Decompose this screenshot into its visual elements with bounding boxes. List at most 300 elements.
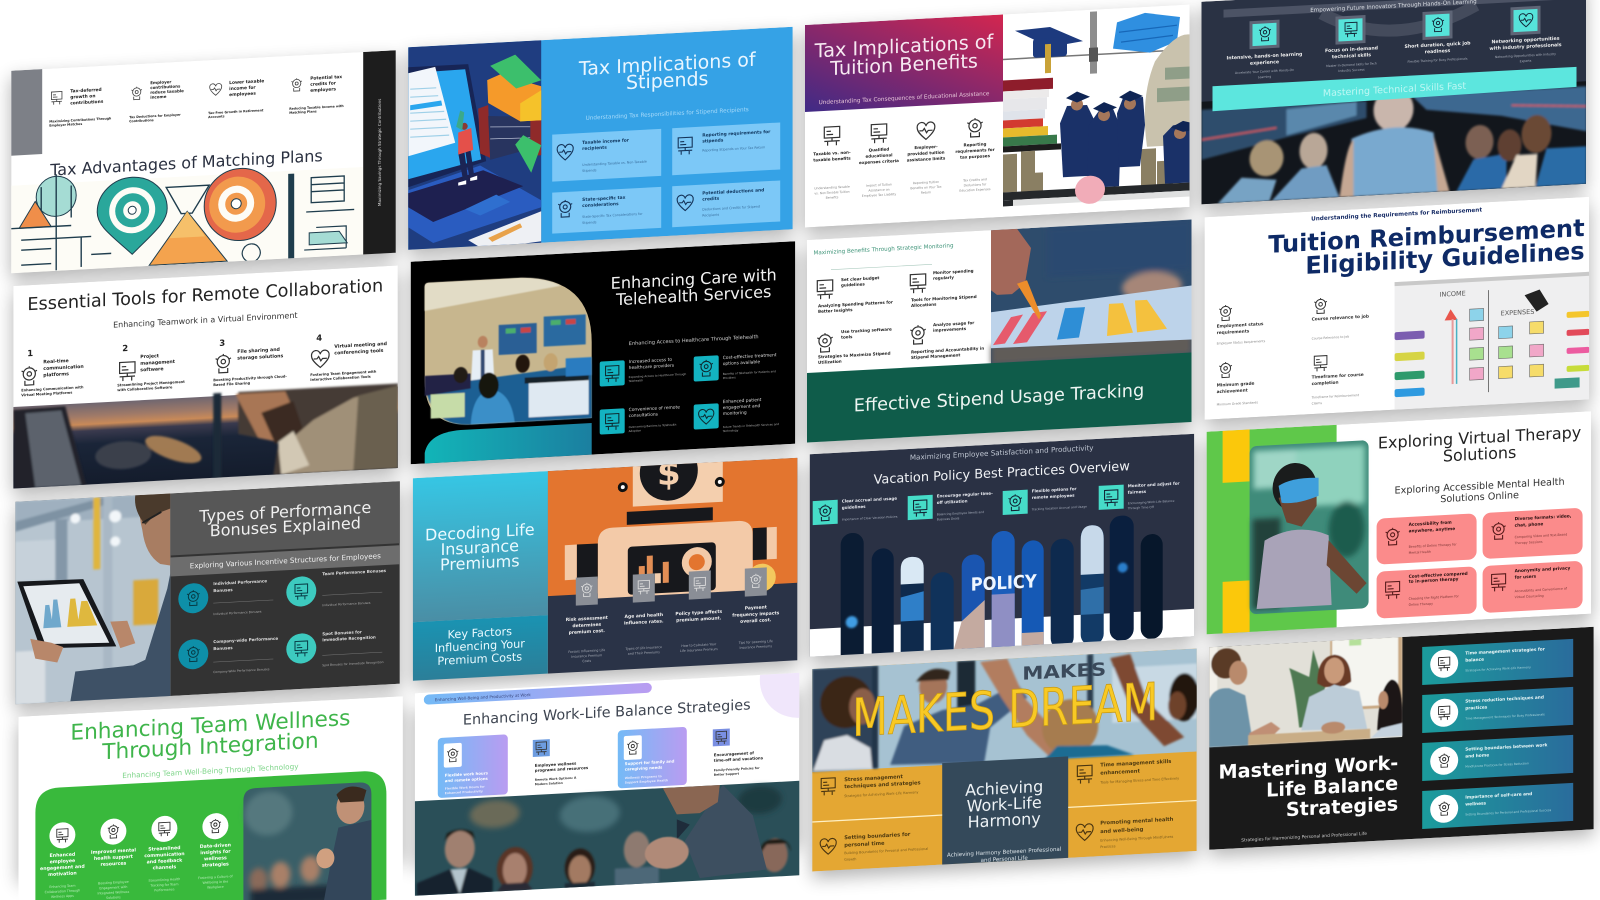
four numbered tools: conferencing tools	[334, 348, 384, 356]
strategy cards: and remote options	[445, 776, 489, 783]
pink cards	[1377, 508, 1583, 619]
subtitle: Enhancing Teamwork in a Virtual Environment	[113, 311, 298, 330]
slide: Enhancing Work-Life Balance Strategies	[414, 673, 800, 896]
item row: tax benefits: credits for	[310, 80, 337, 88]
eligibility items: Course Relevance to Job	[1312, 335, 1349, 341]
slide: Mastering Technical Skills Fast	[1202, 0, 1586, 205]
eligibility items: Minimum grade	[1217, 382, 1254, 389]
premium factors: Age and health	[625, 613, 663, 620]
four benefits	[813, 117, 995, 201]
four numbered tools: Based File Sharing	[213, 381, 251, 387]
photo: pen over chart	[991, 219, 1192, 365]
eligibility items: Claims	[1312, 401, 1322, 406]
amber items: Setting boundaries for	[844, 832, 910, 841]
photo: woman with VR headset	[1250, 440, 1369, 614]
cards grid: Stipends	[582, 220, 597, 225]
amber items: personal time	[844, 841, 885, 849]
title: Life Balance	[1266, 772, 1398, 802]
premium factors: Costs	[582, 659, 592, 663]
title: Tuition Reimbursement	[1268, 214, 1585, 259]
subtitle: Maximizing Benefits Through Strategic Monitoring	[813, 243, 954, 257]
monitoring items: Analyze usage for	[933, 320, 974, 327]
slide: Types of Performance Bonuses Explained	[15, 481, 400, 705]
title: Mastering Work-	[1219, 751, 1398, 784]
slide: Tax Implications of Stipends	[408, 27, 793, 253]
title: Enhancing Care with	[611, 265, 777, 293]
cards grid: Deductions and Credits for Stipend	[702, 205, 760, 212]
strategy cards: Time management strategies for	[1465, 647, 1545, 657]
icon grid: engagement and	[723, 403, 760, 411]
bonus type grid: Individual Performance	[213, 578, 267, 586]
skill columns: with industry professionals	[1489, 42, 1562, 52]
monitoring items: regularly	[933, 275, 954, 281]
header panel	[170, 481, 400, 555]
photo strips: POLICY	[841, 513, 1163, 678]
monitoring items: guidelines	[841, 281, 865, 288]
illustration: scale with graduates and books	[1003, 6, 1190, 208]
four benefits: expenses criteria	[859, 158, 899, 165]
four numbered tools: Project	[140, 354, 159, 360]
skill columns: experience	[1250, 59, 1279, 67]
photo: team high five with sign	[812, 648, 1199, 772]
strategy cards: Modern Solution	[535, 781, 563, 786]
item row: tax benefits: income	[150, 94, 167, 100]
icon grid: Adoption	[629, 428, 641, 433]
four numbered tools: File sharing and	[237, 348, 280, 355]
premium factors: Tips for Lowering Life	[739, 639, 773, 645]
strategy cards: Setting Boundaries for Personal and Professional Success	[1465, 808, 1552, 817]
slide: Tuition Reimbursement Eligibility Guidelines	[1205, 197, 1590, 420]
four numbered tools: Virtual Meeting Platforms	[21, 391, 72, 397]
icon grid: monitoring	[723, 410, 747, 417]
monitoring items: Monitor spending	[933, 268, 974, 275]
strategy cards: wellness	[1465, 801, 1487, 808]
title: Enhancing Team Wellness	[70, 706, 350, 746]
policy items	[813, 481, 1180, 528]
cards grid: State-specific tax	[582, 196, 625, 203]
premium factors: premium amount.	[676, 615, 722, 624]
premium factors: Life Insurance Premium	[680, 647, 718, 653]
cards grid: Understanding Taxable vs. Non-Taxable	[582, 160, 647, 167]
monitoring items: Tools for Monitoring Stipend	[911, 294, 977, 302]
policy items: Flexible options for	[1032, 486, 1077, 493]
wellness columns: employee	[50, 858, 75, 865]
slide: Vacation Policy Best Practices Overview	[810, 434, 1195, 679]
skill columns: Master In-Demand Skills for Tech	[1326, 61, 1377, 68]
amber items: enhancement	[1100, 769, 1140, 777]
amber items: Stress management	[844, 774, 903, 783]
icon grid: consultations	[629, 411, 659, 419]
amber items: and well-being	[1100, 827, 1144, 835]
strategy cards: Setting boundaries between work	[1465, 743, 1547, 753]
bonus type grid: Company-wide Performance	[213, 636, 278, 644]
title: Strategies	[1286, 792, 1398, 821]
strategy cards	[438, 721, 764, 798]
slide: Decoding Life Insurance Premiums	[413, 436, 798, 682]
icon grid: healthcare providers	[629, 363, 675, 371]
amber items: Promoting mental health	[1100, 817, 1173, 827]
bonus type grid	[178, 568, 387, 676]
wellness columns: and feedback	[147, 858, 183, 865]
icon grid: Providers	[723, 375, 736, 380]
item row: tax benefits: Lower taxable	[229, 79, 264, 86]
teal shape	[425, 423, 592, 464]
icon grid	[600, 351, 779, 440]
four numbered tools: with Collaborative Software	[117, 385, 173, 392]
item row: tax benefits: growth on	[70, 93, 95, 101]
subtitle: Solutions Online	[1440, 490, 1519, 505]
pink cards: Accessibility from	[1409, 521, 1452, 528]
slide: Effective Stipend Usage Tracking	[807, 219, 1192, 443]
bonus type grid: Team Performance Bonuses	[322, 568, 387, 576]
wellness columns: insights for	[200, 849, 231, 856]
amber items	[820, 758, 1179, 864]
four benefits: Return	[921, 190, 931, 195]
skill columns: technical skills	[1332, 52, 1371, 60]
strategy cards: Support for family and	[625, 758, 674, 766]
monitoring items: Reporting and Accountability in	[911, 346, 984, 354]
slide: Achieving Work-Life Harmony: Achieving Harmony Between Professional	[947, 847, 1061, 859]
eligibility items: Timeframe for course	[1312, 373, 1364, 381]
subtitle: Key Factors	[448, 625, 512, 641]
eligibility items: requirements	[1217, 328, 1250, 336]
dividers	[812, 800, 1197, 822]
pink cards: Comparing Video and Text-Based	[1515, 532, 1567, 539]
item row: tax benefits: employers	[310, 86, 336, 94]
four benefits: Understanding Taxable	[814, 185, 850, 191]
photo: team high five with sign: MAKES	[1022, 659, 1106, 685]
slide: Achieving Work-Life Harmony: Harmony	[968, 809, 1041, 832]
eligibility items	[1217, 295, 1369, 411]
four benefits: Impact of Tuition	[866, 182, 892, 188]
item row: tax benefits: Potential tax	[310, 75, 342, 82]
green title band	[807, 352, 1192, 443]
policy items: fairness	[1128, 489, 1147, 495]
photo: telehealth control room	[425, 274, 592, 427]
pink cards: for users	[1515, 574, 1537, 581]
photo strips: POLICY: POLICY	[971, 571, 1038, 596]
cards grid: Recipients	[702, 213, 720, 218]
premium factors: overall cost.	[740, 617, 772, 625]
pink cards: Mental Health	[1409, 550, 1431, 555]
premium factors: Insurance Premiums	[740, 644, 772, 650]
illustration: line art	[11, 158, 363, 275]
four benefits: Tax Credits and	[963, 177, 987, 183]
illustration: robot with dollar: $	[657, 453, 681, 494]
premium factors: Insurance Premium	[571, 653, 602, 659]
strategy cards: time-off and vacations	[714, 755, 764, 763]
strategy cards	[1422, 639, 1573, 829]
green panel	[35, 770, 386, 900]
cards grid: stipends	[702, 137, 724, 145]
premium factors: Factors Influencing Life	[568, 648, 605, 654]
four benefits: Benefits	[826, 195, 839, 200]
four benefits: Deductions for	[964, 182, 987, 188]
four numbered tools: Streamlining Project Management	[117, 380, 185, 387]
wellness columns: Wellbeing in the	[203, 880, 228, 885]
four numbered tools: platforms	[43, 371, 69, 379]
wellness columns: wellness	[204, 855, 227, 862]
pink cards: Anonymity and privacy	[1515, 566, 1570, 574]
eligibility items: Employment status	[1217, 322, 1263, 330]
four numbered tools: 4	[316, 334, 322, 344]
skill columns: Intensive, hands-on learning	[1227, 52, 1302, 61]
item row: tax benefits: Reducing Taxable Income with	[289, 104, 344, 111]
item row: tax benefits: Maximizing Contributions Through	[49, 116, 111, 124]
photo: pointing man	[243, 782, 371, 900]
four benefits: Taxable vs. non-	[813, 150, 851, 157]
slide: Tax Implications of Tuition Benefits: Understanding Tax Consequences of Educational Assistance	[819, 91, 990, 106]
four benefits: Education Expenses	[959, 187, 991, 193]
wellness columns: Boosting Employee	[98, 880, 129, 885]
title: Telehealth Services	[615, 282, 771, 309]
wellness columns: Engagement with	[99, 885, 127, 890]
wellness columns: Integrated Wellness	[98, 890, 130, 895]
premium factors: and Their Premiums	[628, 650, 660, 656]
slide: Mastering Technical Skills Fast: Mastering Technical Skills Fast	[1323, 81, 1466, 99]
amber items: Growth	[844, 857, 856, 862]
strategy cards: Employee wellness	[535, 761, 576, 768]
eligibility items: Minimum Grade Standards	[1217, 400, 1258, 407]
subtitle: Influencing Your	[435, 637, 525, 655]
eligibility items: Course relevance to job	[1312, 314, 1369, 323]
slide: Achieving Work-Life Harmony: Work-Life	[967, 793, 1042, 816]
wellness columns: resources	[100, 861, 127, 868]
pink cards: anywhere, anytime	[1409, 526, 1455, 534]
item row: tax benefits: Contributions	[129, 118, 154, 123]
subtitle: Enhancing Access to Healthcare Through Telehealth	[629, 334, 759, 347]
policy items: Monitor and adjust for	[1128, 481, 1180, 488]
slide: Achieving Work-Life Harmony: Achieving	[965, 777, 1043, 800]
policy items: Importance of Clear Vacation Policies	[842, 515, 898, 522]
subtitle strip	[1224, 0, 1566, 18]
strategy cards: Wellness Programs to	[625, 774, 662, 780]
strategy cards: Strategies for Achieving Work-Life Harmony	[1465, 665, 1531, 673]
pink cards: Accessibility and Convenience of	[1515, 586, 1567, 593]
strategy cards: Flexible Work Hours for	[445, 785, 485, 791]
premium factors: determines	[572, 622, 602, 629]
skill columns: Industry Success	[1338, 68, 1365, 73]
monitoring items: Utilization	[818, 359, 842, 365]
strategy cards: Remote Work Options: A	[535, 776, 576, 782]
four numbered tools	[21, 330, 387, 397]
illustration: robot with dollar	[565, 437, 777, 602]
vertical caption: Maximizing Savings Through Strategic Contributions	[377, 99, 382, 206]
policy items: Balancing Employee Needs and	[937, 510, 984, 517]
icon grid: Telehealth	[628, 378, 643, 383]
wellness columns: communication	[144, 851, 185, 859]
wellness columns: Data-driven	[200, 843, 231, 850]
monitoring items: Stipend Management	[911, 352, 960, 360]
turquoise banner	[1212, 67, 1576, 111]
photo: man with tablet	[15, 493, 170, 705]
left panel	[413, 471, 548, 622]
title: Essential Tools for Remote Collaboration	[27, 276, 383, 315]
wellness columns: Tracking for Team	[149, 882, 178, 888]
bonus type grid: Spot Bonuses for	[322, 629, 362, 636]
pink cards: to in-person therapy	[1409, 576, 1459, 585]
monitoring items: Allocations	[911, 302, 937, 308]
strategy cards: caregiving needs	[625, 765, 663, 772]
item row: tax benefits: reduce taxable	[150, 88, 184, 95]
item row: tax benefits: Tax-deferred	[70, 88, 102, 95]
cards grid: recipients	[582, 145, 607, 152]
icon grid: Cost-effective treatment	[723, 353, 777, 361]
pink cards: Choosing the Right Platform for	[1409, 594, 1459, 601]
slide: Tax Implications of Tuition Benefits: Tax Implications of	[815, 30, 993, 62]
premium factors: Types of Life Insurance	[626, 645, 662, 651]
eligibility items: Employee Status Requirements	[1217, 339, 1266, 346]
title: Vacation Policy Best Practices Overview	[874, 459, 1130, 488]
skill columns: Flexible Training for Busy Professionals	[1408, 57, 1468, 64]
four numbered tools: 1	[27, 349, 33, 359]
icon grid: Benefits of Telehealth for Patients and	[723, 369, 776, 376]
item row: tax benefits: employees	[229, 91, 256, 98]
title: Decoding Life	[425, 520, 535, 545]
eligibility items: completion	[1312, 380, 1339, 387]
photo: man with headset at night	[13, 383, 398, 489]
slide: Enhancing Work-Life Balance Strategies: Enhancing Well-Being and Productivity at Work	[435, 692, 531, 702]
four numbered tools: Fostering Team Engagement with	[310, 370, 376, 377]
photo: three women meeting	[1209, 637, 1402, 747]
item row: tax benefits: Matching Plans	[289, 109, 317, 115]
slide: Tax Implications of Tuition Benefits	[805, 4, 1190, 228]
item row: tax benefits: contributions	[150, 83, 181, 90]
pink cards: Cost-effective compared	[1409, 572, 1468, 580]
pink cards: Virtual Counseling	[1515, 594, 1544, 599]
four numbered tools: Real-time	[43, 359, 69, 365]
four benefits: assistance limits	[907, 155, 946, 163]
subtitle: Understanding the Requirements for Reimbursement	[1311, 208, 1482, 223]
monitoring items: tools	[841, 334, 853, 340]
subtitle: Exploring Various Incentive Structures for Employees	[190, 551, 381, 570]
strategy cards: Better Support	[714, 771, 740, 777]
four numbered tools: storage solutions	[237, 353, 284, 362]
photo: futuristic lab	[1202, 77, 1586, 205]
strategy cards: Encouragement of	[714, 750, 754, 757]
icon grid: Technology	[722, 428, 739, 433]
strategy cards: Importance of self-care and	[1465, 792, 1532, 801]
skill columns: Accelerate Your Career with Hands-On	[1235, 68, 1294, 75]
four benefits: requirements for	[955, 147, 995, 154]
skill columns	[1227, 5, 1562, 81]
whiteboard photo	[1395, 272, 1590, 410]
subtitle: Premium Costs	[437, 650, 522, 668]
wellness columns: Enhancing Team	[49, 884, 75, 889]
policy items: guidelines	[842, 504, 866, 510]
icon grid: Overcoming Barriers to Telehealth	[629, 423, 676, 429]
arc decoration	[1322, 5, 1476, 34]
skill columns: Experts	[1520, 59, 1532, 63]
policy items: Clear accrual and usage	[842, 496, 897, 504]
policy items: Business Goals	[937, 516, 960, 522]
item row: tax benefits: Tax-Free Growth in Retirement	[208, 108, 263, 115]
premium factors: Payment	[745, 605, 767, 612]
bonus type grid: Company-Wide Performance Bonuses	[213, 667, 270, 674]
pink cards: Diverse formats: video,	[1515, 514, 1571, 522]
policy items: off utilization	[937, 498, 968, 505]
wellness columns: health support	[94, 854, 134, 862]
cards grid: State-Specific Tax Considerations for	[582, 212, 643, 219]
wellness columns: Collaboration Through	[45, 888, 80, 894]
amber items: Strategies for Achieving Work-Life Harmony	[844, 790, 918, 798]
whiteboard photo: INCOME	[1440, 289, 1466, 299]
slide: Mastering Work-Life Balance Strategies	[1209, 627, 1594, 850]
slide: Achieving Work-Life Harmony	[812, 648, 1199, 873]
premium factors: How to Calculate Your	[681, 642, 716, 648]
icon grid: Future Trends in Telehealth Services and	[723, 422, 779, 429]
four benefits: provided tuition	[907, 150, 945, 157]
item row: tax benefits: Employer	[150, 79, 171, 85]
corner decoration	[760, 673, 800, 718]
premium factors	[566, 567, 780, 664]
wellness columns: Improved mental	[91, 848, 136, 856]
strategy cards: Stress reduction techniques and	[1465, 695, 1544, 705]
wellness columns: strategies	[202, 861, 229, 869]
bonus type grid: Individual Performance Bonuses	[213, 610, 262, 616]
four numbered tools: Boosting Productivity through Cloud-	[213, 374, 287, 382]
slide: Tax Implications of Tuition Benefits: Tuition Benefits	[829, 49, 978, 80]
pink cards: Therapy Sessions	[1514, 540, 1543, 545]
illustration: laptop and money	[408, 40, 541, 253]
cards grid: Reporting Stipends on Your Tax Return	[702, 145, 765, 153]
strategy cards: Family-Friendly Policies for	[714, 766, 760, 772]
photo: pointing businessman	[415, 781, 800, 897]
icon grid: Expanding Access to Healthcare Through	[629, 372, 686, 379]
item row: tax benefits: Accounts	[208, 114, 225, 119]
cards grid: Taxable income for	[582, 139, 629, 146]
eligibility items: Timeframe for Reimbursement	[1312, 393, 1359, 400]
title: Insurance	[441, 536, 519, 559]
cards grid: credits	[702, 196, 720, 203]
wellness columns: motivation	[48, 870, 77, 878]
item row: tax benefits: Employer Matches	[49, 122, 82, 128]
four benefits: Reporting	[964, 141, 986, 148]
pill subtitle	[424, 683, 652, 705]
monitoring items: Better Insights	[818, 307, 853, 314]
four numbered tools: software	[140, 366, 164, 373]
skill columns: readiness	[1425, 48, 1451, 55]
premium factors: premium cost.	[569, 628, 605, 636]
wellness columns: Streamlining Health	[149, 877, 180, 883]
slide: Achieving Work-Life Harmony: and Personal Life	[981, 855, 1028, 864]
four benefits: educational	[865, 152, 893, 159]
bonus type grid: Spot Bonuses for Immediate Recognition	[322, 660, 384, 667]
title: Exploring Virtual Therapy	[1378, 423, 1581, 453]
four numbered tools: Interactive Collaboration Tools	[310, 375, 371, 382]
bonus type grid: Individual Performance Bonuses	[322, 601, 371, 607]
pink cards: chat, phone	[1515, 521, 1543, 529]
monitoring items: improvements	[933, 326, 967, 333]
title: Tax Advantages of Matching Plans	[49, 146, 323, 180]
strategy cards: Flexible work hours	[445, 770, 488, 778]
four numbered tools: communication	[43, 364, 84, 372]
strategy cards: and home	[1465, 752, 1489, 760]
amber items: Tools for Managing Stress and Time Effectively	[1099, 776, 1179, 785]
cards grid: Potential deductions and	[702, 188, 764, 197]
monitoring items: Analyzing Spending Patterns for	[818, 299, 893, 308]
slide: Enhancing Care with Telehealth Services	[411, 241, 795, 465]
cards grid: Stipends	[582, 168, 597, 173]
pink cards: Benefits of Online Therapy for	[1409, 542, 1457, 549]
slide: Enhancing Team Wellness Through Integration	[18, 696, 403, 900]
four benefits: Assistance on	[868, 187, 890, 193]
icon grid: Increased access to	[629, 358, 672, 365]
four numbered tools: 3	[219, 339, 225, 349]
four benefits: Reporting Tuition	[913, 180, 939, 185]
cards grid: Reporting requirements for	[702, 130, 770, 139]
item row: tax benefits: income for	[229, 85, 256, 92]
